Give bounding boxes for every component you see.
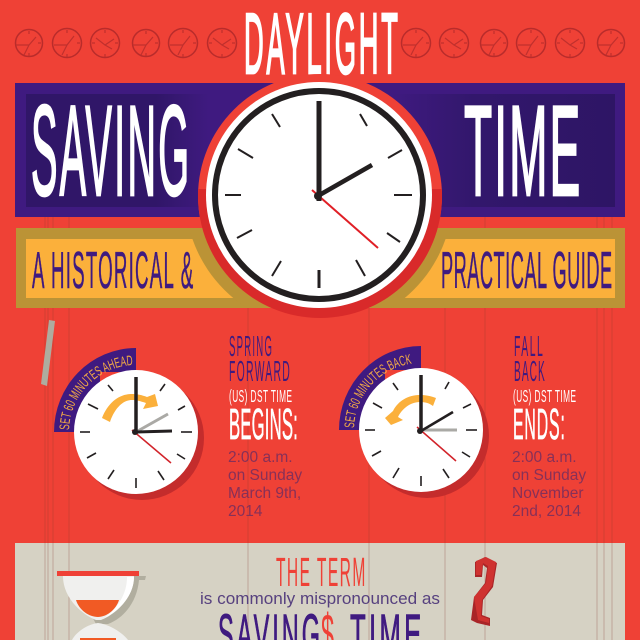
text block: spring forward: 2014 xyxy=(228,503,263,520)
text block: fall back: November xyxy=(512,485,584,502)
icon: hourglass xyxy=(57,571,146,640)
heading: Saving: SAVING xyxy=(31,80,189,223)
heading: Time: TIME xyxy=(464,81,580,223)
text block: fall back: FALL xyxy=(514,329,543,363)
row of small clocks: right xyxy=(402,28,624,58)
spring clock xyxy=(54,348,204,500)
gray marker bar xyxy=(41,320,55,386)
text block: spring forward: 2:00 a.m. xyxy=(228,449,293,466)
gray panel xyxy=(15,543,625,640)
orange banner xyxy=(16,228,625,308)
text block: fall back: (US) DST TIME xyxy=(513,385,576,406)
fall clock xyxy=(339,346,489,498)
heading: the term: THE TERM xyxy=(276,549,365,595)
text block: fall back: ENDS: xyxy=(513,400,565,450)
title: Daylight: DAYLIGHT xyxy=(244,0,398,92)
clock hands xyxy=(312,101,378,248)
spring clock hands xyxy=(132,377,172,463)
text block: spring forward: FORWARD xyxy=(229,354,290,388)
icon: question mark xyxy=(471,557,497,626)
purple banner xyxy=(15,83,625,217)
main clock xyxy=(198,74,442,318)
clock ticks xyxy=(225,114,412,288)
subtitle right: PRACTICAL GUIDE xyxy=(441,243,612,300)
subtitle left: A HISTORICAL & xyxy=(32,243,193,300)
text block: fall back xyxy=(512,329,586,520)
banner: set 60 minutes ahead: SET 60 MINUTES AHEAD xyxy=(59,356,132,430)
text block: fall back: on Sunday xyxy=(512,467,586,484)
text block: spring forward: SPRING xyxy=(229,329,272,363)
arrow: back xyxy=(385,395,436,425)
fall clock hands xyxy=(417,375,457,461)
arrow: forward xyxy=(102,394,158,422)
text block: spring forward xyxy=(228,329,302,520)
text block: fall back: BACK xyxy=(514,354,545,388)
text block: fall back: 2:00 a.m. xyxy=(512,449,577,466)
text block: fall back: 2nd, 2014 xyxy=(512,503,581,520)
row of small clocks: left xyxy=(16,28,236,58)
banner: set 60 minutes back: SET 60 MINUTES BACK xyxy=(344,354,412,428)
text block: spring forward: on Sunday xyxy=(228,467,302,484)
text block: spring forward: BEGINS: xyxy=(229,401,298,450)
text: savings time xyxy=(218,603,421,640)
text block: spring forward: (US) DST TIME xyxy=(229,385,292,406)
text block: spring forward: March 9th, xyxy=(228,485,301,502)
text: commonly mispronounced: is commonly mispronounced as xyxy=(200,589,440,608)
